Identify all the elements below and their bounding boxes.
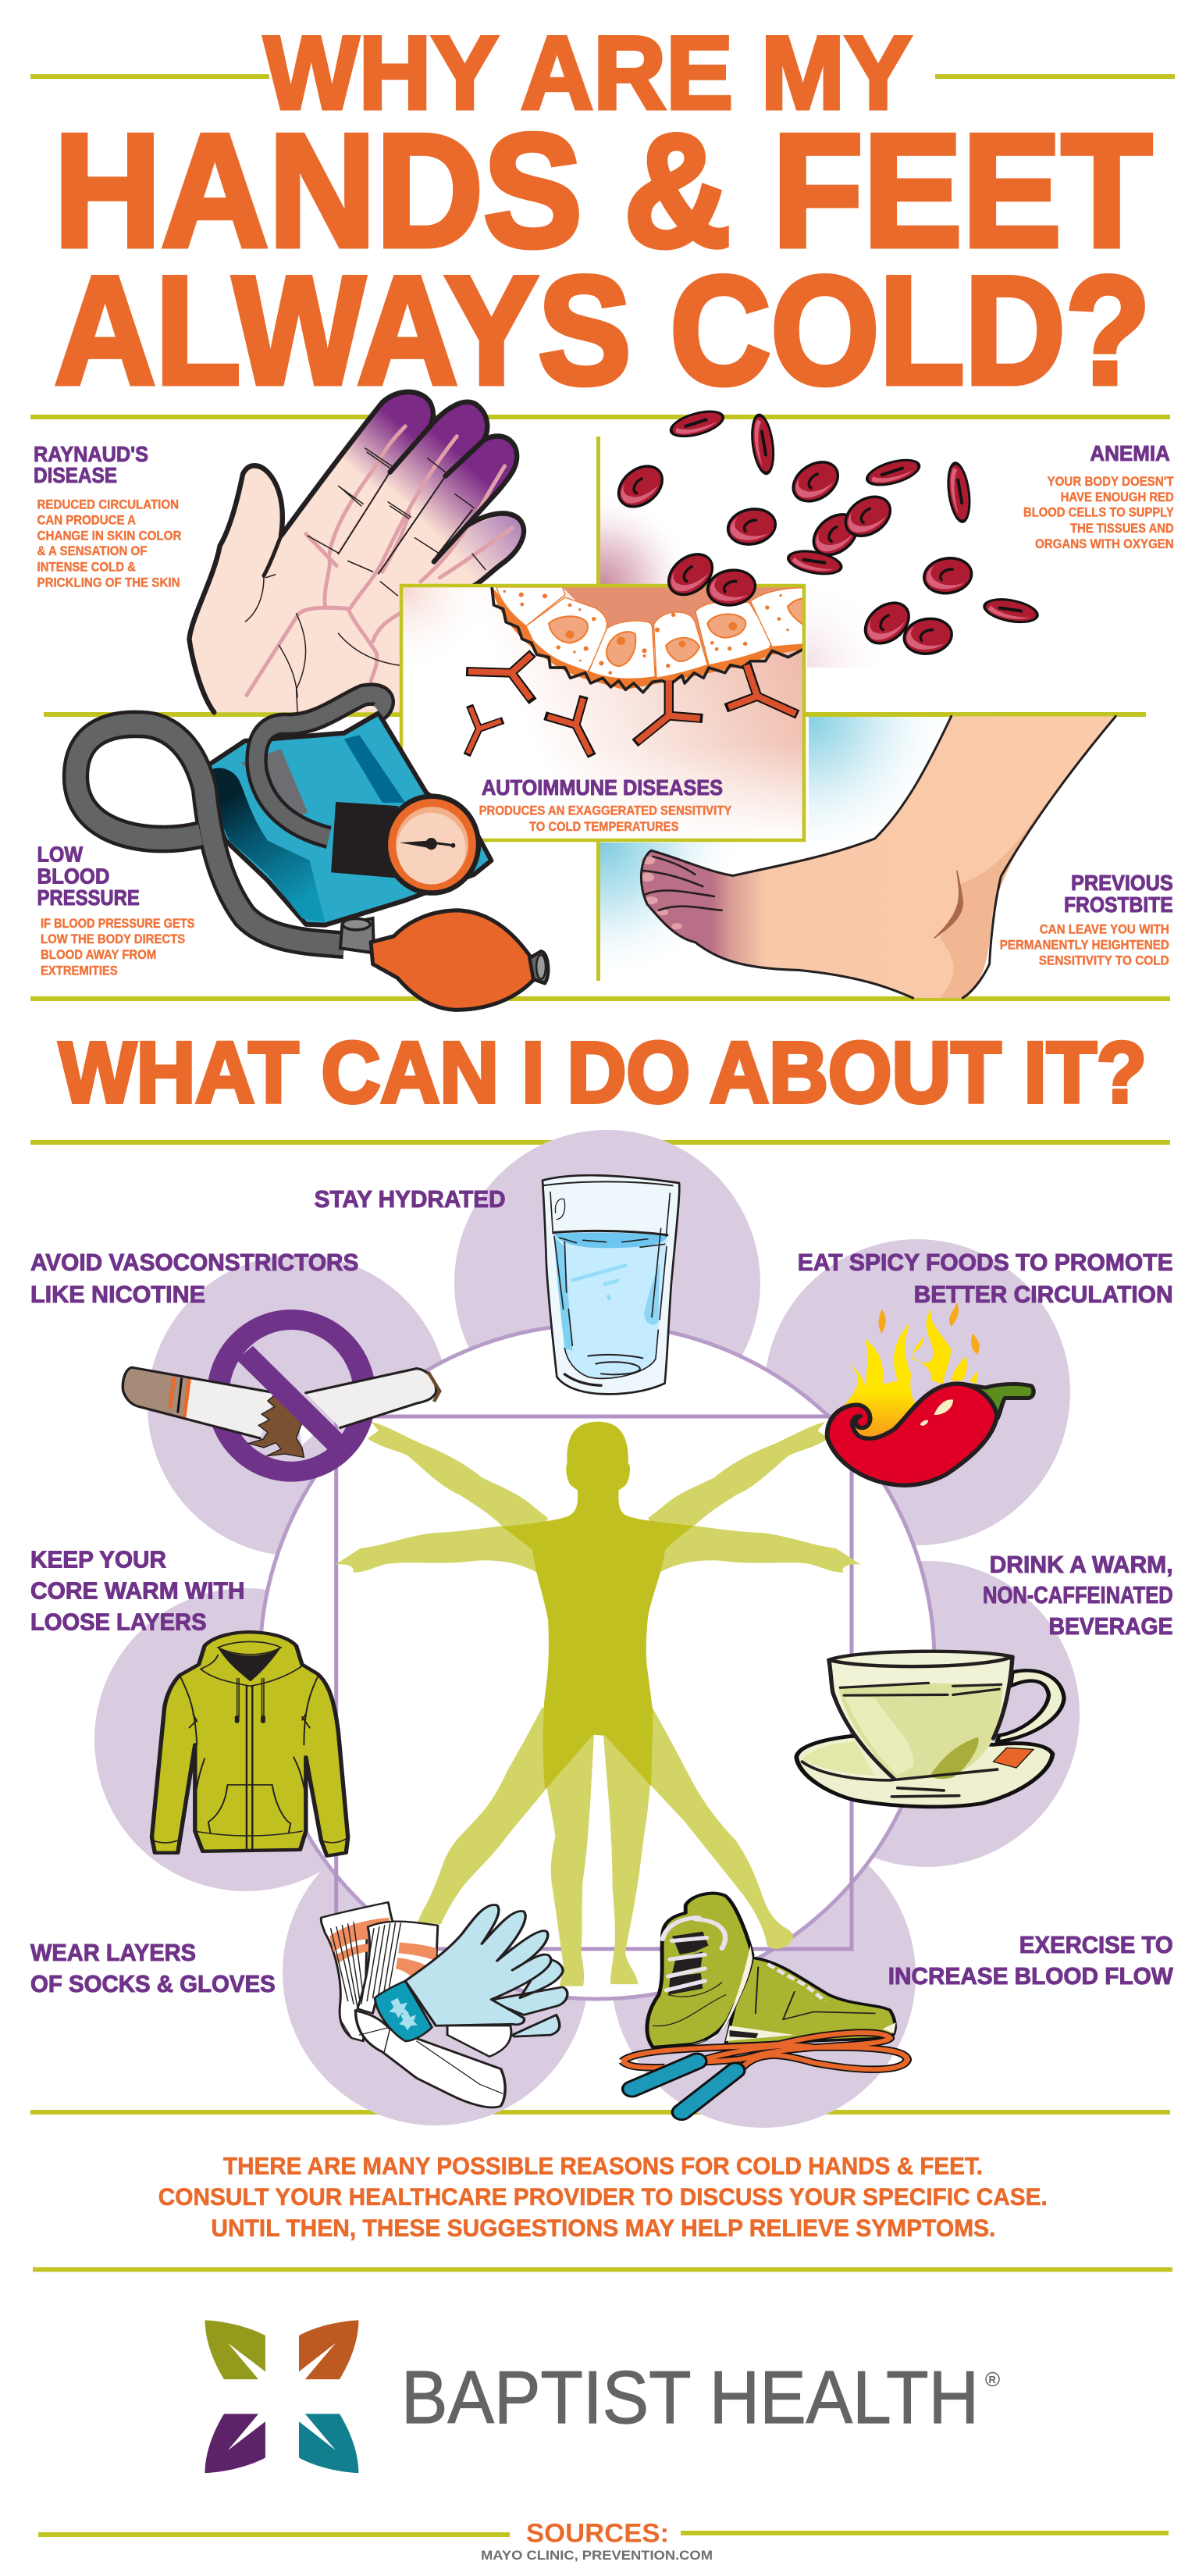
panel: autoimmune diseases [401, 586, 804, 840]
anemia text: THE TISSUES AND [1070, 522, 1174, 536]
label: socks and gloves: WEAR LAYERS [30, 1940, 196, 1966]
logo: baptist health mark [205, 2320, 358, 2473]
previous frostbite text [1000, 871, 1173, 968]
low blood pressure text [37, 843, 194, 978]
raynaud's disease text: RAYNAUD'S [34, 442, 148, 466]
label: socks and gloves: OF SOCKS & GLOVES [30, 1971, 276, 1997]
anemia text: HAVE ENOUGH RED [1061, 490, 1174, 504]
raynaud's disease text: REDUCED CIRCULATION [37, 498, 179, 512]
label: keep core warm: KEEP YOUR [30, 1546, 166, 1573]
icon: cup of tea [796, 1651, 1064, 1807]
logo: baptist health wordmark: BAPTIST HEALTH [401, 2356, 979, 2439]
low blood pressure text: BLOOD AWAY FROM [41, 948, 156, 962]
rule: title left [30, 74, 269, 79]
autoimmune description [479, 803, 732, 834]
sources: SOURCES: [526, 2519, 669, 2549]
illustration: red blood cells [610, 405, 1041, 658]
raynaud's disease text: DISEASE [34, 463, 117, 487]
autoimmune description: PRODUCES AN EXAGGERATED SENSITIVITY [479, 803, 732, 818]
closing advice text: THERE ARE MANY POSSIBLE REASONS FOR COLD HANDS & FEET. [223, 2152, 983, 2180]
label: warm beverage: DRINK A WARM, [990, 1552, 1173, 1578]
raynaud's disease text: PRICKLING OF THE SKIN [37, 576, 180, 590]
low blood pressure text: PRESSURE [37, 885, 140, 910]
label: exercise [888, 1932, 1173, 1990]
anemia text [1023, 441, 1174, 551]
label: keep core warm: LOOSE LAYERS [30, 1609, 206, 1635]
closing advice text: UNTIL THEN, THESE SUGGESTIONS MAY HELP RELIEVE SYMPTOMS. [211, 2214, 995, 2242]
icon: glass of water [543, 1175, 679, 1394]
label: avoid vasoconstrictors: LIKE NICOTINE [30, 1281, 205, 1308]
label: socks and gloves [30, 1940, 276, 1997]
raynaud's disease text: CAN PRODUCE A [37, 513, 136, 527]
icon: running shoes and jump rope [622, 1894, 907, 2112]
sources [38, 2519, 1169, 2563]
label: keep core warm: CORE WARM WITH [30, 1578, 245, 1605]
heading: what can I do: WHAT CAN I DO ABOUT IT? [59, 1024, 1147, 1121]
anemia text: ORGANS WITH OXYGEN [1035, 537, 1174, 551]
raynaud's disease text: CHANGE IN SKIN COLOR [37, 529, 182, 543]
label: warm beverage [983, 1552, 1173, 1640]
label: exercise: INCREASE BLOOD FLOW [888, 1963, 1173, 1990]
illustration: foot with frostbite [640, 716, 1115, 998]
border [401, 586, 804, 840]
raynaud's disease text: & A SENSATION OF [37, 544, 148, 558]
panel: remedies [30, 1130, 1173, 2128]
previous frostbite text: PREVIOUS [1071, 871, 1173, 895]
closing advice text [158, 2152, 1048, 2242]
sources: MAYO CLINIC, PREVENTION.COM [481, 2548, 713, 2563]
label: avoid vasoconstrictors: AVOID VASOCONSTRICTORS [30, 1249, 358, 1276]
icon: broken cigarette with no-smoking sign [123, 1320, 439, 1472]
icon: socks and gloves [321, 1902, 567, 2107]
rule: title right [935, 74, 1175, 79]
low blood pressure text: EXTREMITIES [41, 964, 118, 978]
logo: baptist health wordmark: R [988, 2374, 996, 2385]
label: avoid vasoconstrictors [30, 1249, 358, 1308]
previous frostbite text: CAN LEAVE YOU WITH [1040, 922, 1169, 936]
closing advice text: CONSULT YOUR HEALTHCARE PROVIDER TO DISCUSS YOUR SPECIFIC CASE. [158, 2182, 1048, 2211]
label: spicy foods: BETTER CIRCULATION [914, 1281, 1173, 1308]
raynaud's disease text: INTENSE COLD & [37, 560, 136, 574]
title line 1: WHY ARE MY [264, 16, 912, 131]
label: exercise: EXERCISE TO [1019, 1932, 1173, 1958]
illustration: blood pressure cuff [76, 694, 548, 1010]
illustration: cells and antibodies [401, 586, 804, 840]
label: spicy foods: EAT SPICY FOODS TO PROMOTE [798, 1249, 1173, 1276]
autoimmune heading: AUTOIMMUNE DISEASES [482, 775, 723, 800]
title [30, 16, 1175, 416]
anemia text: ANEMIA [1090, 441, 1170, 465]
label: warm beverage: BEVERAGE [1049, 1613, 1172, 1640]
previous frostbite text: SENSITIVITY TO COLD [1039, 954, 1169, 968]
anemia text: BLOOD CELLS TO SUPPLY [1023, 506, 1174, 520]
low blood pressure text: LOW [37, 843, 84, 867]
icon: chili pepper with flames [827, 1302, 1034, 1485]
raynaud's disease text [34, 442, 182, 590]
autoimmune description: TO COLD TEMPERATURES [529, 820, 679, 834]
figure: vitruvian man [335, 1422, 861, 1986]
label: stay hydrated: STAY HYDRATED [315, 1186, 506, 1213]
icon: hoodie [151, 1632, 348, 1856]
label: spicy foods [798, 1249, 1173, 1308]
illustration: hand with purple fingertips [189, 383, 532, 712]
label: keep core warm [30, 1546, 245, 1635]
previous frostbite text: FROSTBITE [1064, 893, 1173, 917]
previous frostbite text: PERMANENTLY HEIGHTENED [1000, 938, 1169, 952]
panel: causes [30, 383, 1174, 1010]
anemia text: YOUR BODY DOESN'T [1048, 475, 1174, 489]
low blood pressure text: IF BLOOD PRESSURE GETS [41, 917, 194, 931]
low blood pressure text: LOW THE BODY DIRECTS [41, 932, 185, 946]
low blood pressure text: BLOOD [37, 864, 109, 889]
